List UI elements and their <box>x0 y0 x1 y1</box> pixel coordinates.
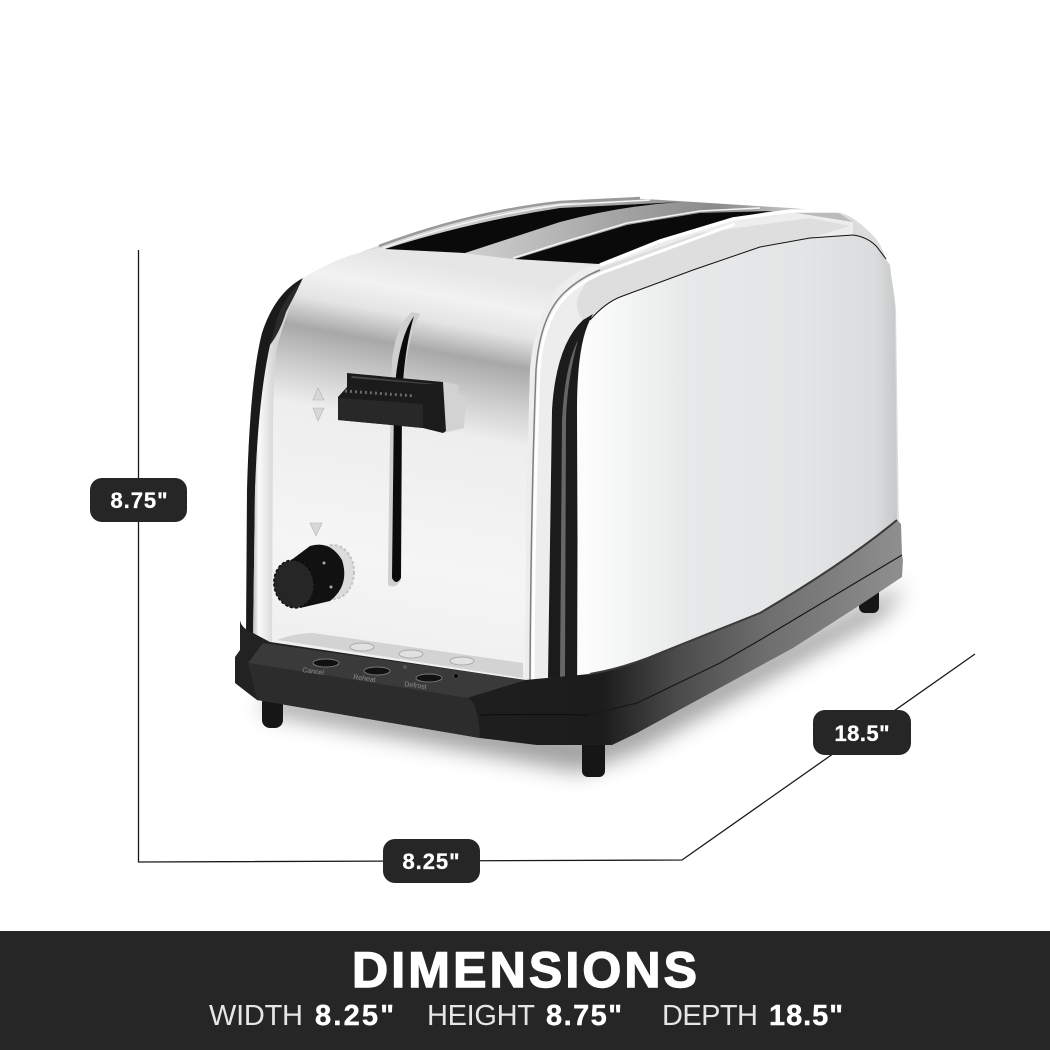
body silhouette <box>246 198 899 700</box>
control panel <box>248 633 526 738</box>
label: height <box>90 478 187 522</box>
footer specs: 8.75" <box>546 1000 622 1032</box>
label: height: 8.75" <box>110 488 168 513</box>
footer specs: 18.5" <box>769 1000 843 1032</box>
dimension lines <box>138 250 975 862</box>
dark band beside side panel <box>548 314 593 678</box>
label: depth: 18.5" <box>834 721 890 746</box>
base groove <box>587 555 902 715</box>
buttons <box>313 659 339 667</box>
label: width: 8.25" <box>402 849 460 874</box>
slot 2 highlight <box>600 211 840 265</box>
toaster <box>235 198 905 777</box>
feet <box>262 585 879 777</box>
footer specs: HEIGHT <box>427 1000 535 1032</box>
slot 2 <box>515 211 773 264</box>
browning knob <box>270 545 354 611</box>
left dark edge <box>246 278 303 640</box>
footer specs <box>209 1000 843 1032</box>
left corner smudge <box>270 279 303 345</box>
chrome trim between front and side <box>525 212 853 680</box>
footer band <box>0 931 1050 1050</box>
control panel: Reheat <box>353 674 376 684</box>
side panel <box>577 235 897 676</box>
left chrome strip <box>253 278 303 642</box>
button labels: Cancel <box>302 667 325 677</box>
lever handle <box>338 373 466 433</box>
footer title: DIMENSIONS <box>352 942 697 998</box>
control panel: Defrost <box>404 681 427 691</box>
slot 1 <box>385 202 680 253</box>
side panel rim <box>590 235 886 320</box>
footer specs: 8.25" <box>315 1000 394 1032</box>
front panel <box>272 248 597 680</box>
lever track <box>388 312 420 587</box>
base rim <box>590 520 897 674</box>
arrow icons <box>310 388 324 536</box>
top deck <box>380 199 853 264</box>
slot 1 rim <box>379 198 640 246</box>
base <box>235 520 903 745</box>
footer specs: WIDTH <box>209 1000 303 1032</box>
footer specs: DEPTH <box>662 1000 758 1032</box>
label: depth <box>813 710 911 755</box>
label: width <box>383 839 480 883</box>
reflected buttons <box>350 643 374 651</box>
floor shadow <box>262 585 905 772</box>
